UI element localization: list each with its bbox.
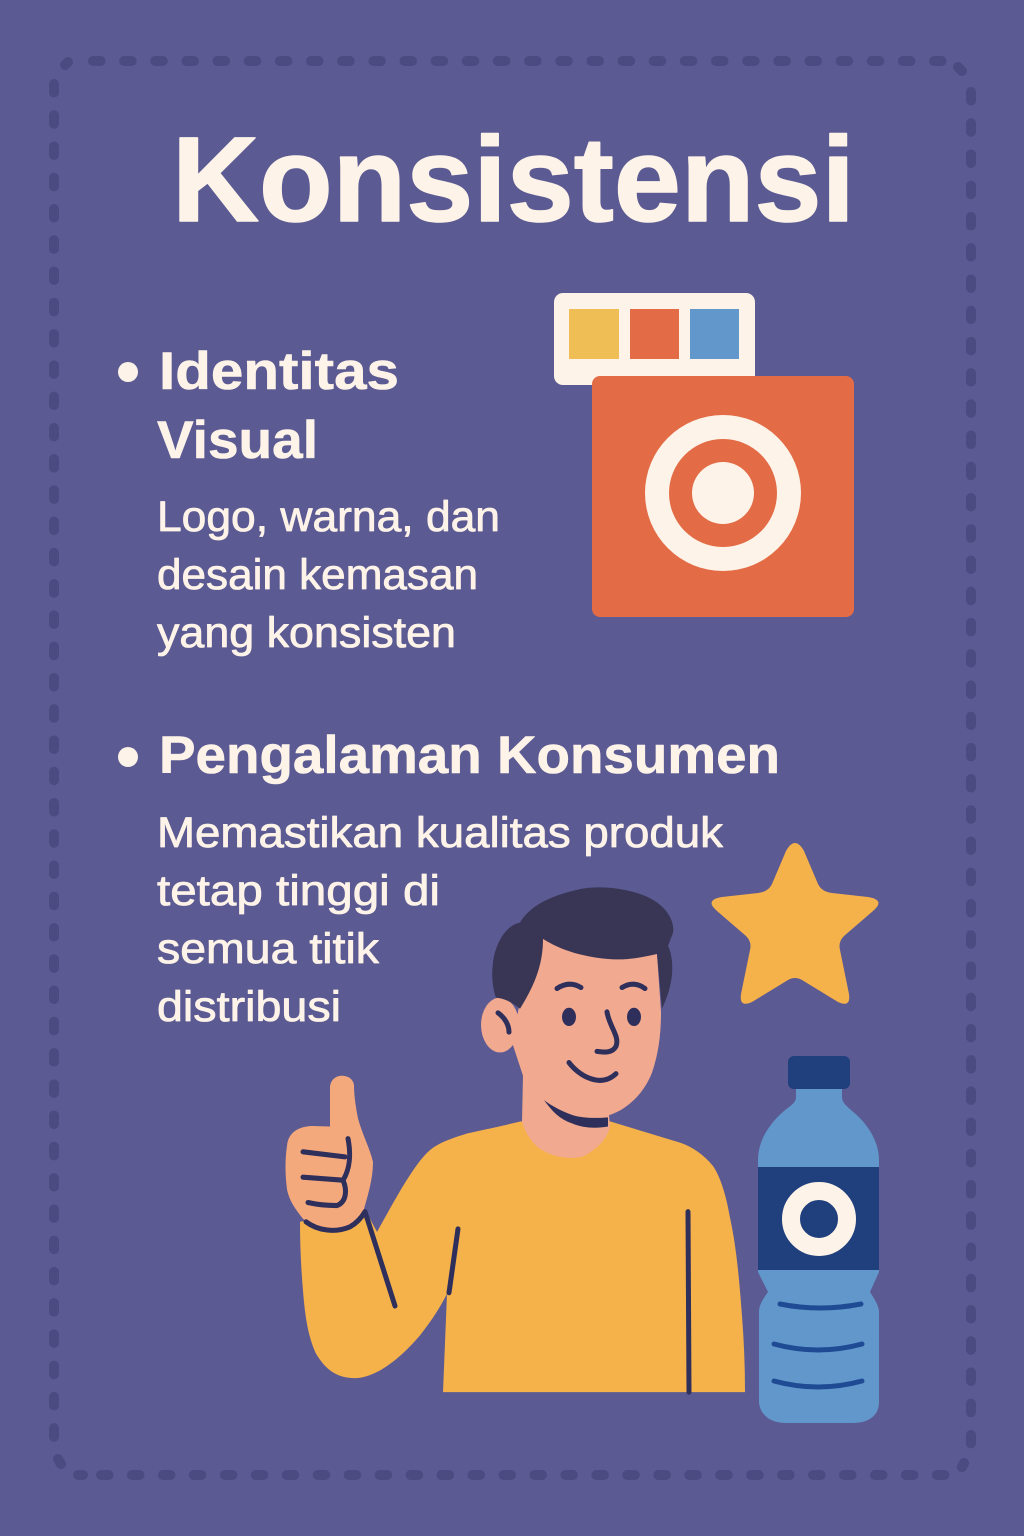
icon: brand palette and logo bbox=[554, 293, 854, 617]
heading: identitas visual: Visual bbox=[157, 411, 318, 470]
title: Konsistensi bbox=[172, 111, 855, 247]
body text: pengalaman konsumen: semua titik bbox=[157, 925, 380, 973]
face and neck bbox=[512, 931, 661, 1158]
finger lines bbox=[303, 1139, 350, 1206]
body text: identitas visual: Logo, warna, dan bbox=[157, 493, 500, 541]
hand bbox=[286, 1076, 373, 1231]
color swatch card bbox=[554, 293, 755, 385]
body text: pengalaman konsumen: distribusi bbox=[157, 983, 341, 1031]
bullet: pengalaman konsumen bbox=[118, 747, 138, 767]
body text: pengalaman konsumen: tetap tinggi di bbox=[157, 867, 440, 915]
neck shadow bbox=[544, 1100, 608, 1128]
body text: pengalaman konsumen: Memastikan kualitas produk bbox=[157, 809, 724, 857]
eyes bbox=[562, 1008, 641, 1026]
ear inner line bbox=[498, 1013, 509, 1032]
hair bbox=[492, 887, 673, 1009]
icon: star bbox=[712, 843, 878, 1004]
illustration: person thumbs up bbox=[286, 887, 745, 1392]
brows, nose and mouth bbox=[557, 984, 645, 1080]
heading: identitas visual bbox=[157, 342, 399, 470]
body text: identitas visual: yang konsisten bbox=[157, 609, 456, 657]
section: pengalaman konsumen text bbox=[118, 726, 780, 1031]
icon: water bottle bbox=[758, 1056, 879, 1423]
heading: pengalaman konsumen: Pengalaman Konsumen bbox=[159, 726, 780, 785]
bottle cap bbox=[788, 1056, 850, 1089]
cuff and sleeve lines bbox=[306, 1212, 689, 1392]
ear bbox=[481, 998, 519, 1052]
body text: identitas visual bbox=[157, 493, 500, 657]
body text: pengalaman konsumen bbox=[157, 809, 724, 1031]
bullet: identitas visual bbox=[118, 362, 138, 382]
section: identitas visual text bbox=[118, 342, 500, 657]
heading: identitas visual: Identitas bbox=[159, 342, 399, 401]
bottle ribs bbox=[774, 1304, 862, 1387]
body text: identitas visual: desain kemasan bbox=[157, 551, 478, 599]
bottle label bbox=[758, 1167, 879, 1270]
sweater bbox=[300, 1121, 745, 1392]
bottle body bbox=[758, 1085, 879, 1423]
logo square bbox=[592, 376, 854, 617]
